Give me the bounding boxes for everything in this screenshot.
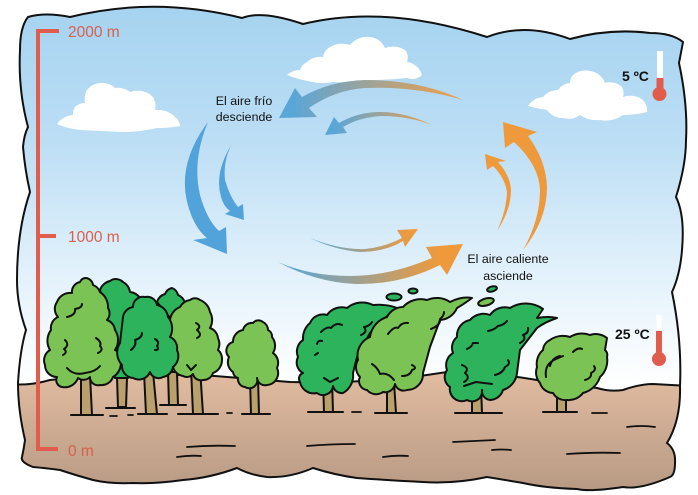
- arrow: large upper return: [279, 80, 463, 118]
- arrow: large lower flow: [278, 244, 463, 284]
- tree: light left large: [44, 278, 121, 415]
- tree: bent light 2: [536, 333, 607, 412]
- tree: bent dark 2: [445, 304, 557, 413]
- cloud top: [287, 37, 422, 83]
- tree: back dark left: [100, 279, 140, 408]
- tree: dark front: [117, 297, 178, 414]
- ground marks: [110, 412, 655, 457]
- text: warm air rises: El aire caliente: [467, 252, 549, 266]
- arrow: large warm air rising: [503, 122, 547, 250]
- arrow: small warm air rising: [485, 154, 511, 231]
- tree: light right of group: [170, 298, 222, 414]
- text: warm air rises: asciende: [483, 269, 533, 283]
- text: cold air descends: desciende: [216, 110, 272, 124]
- tree: bent light 1: [356, 298, 472, 413]
- tree: small light: [226, 320, 278, 414]
- altitude scale: [38, 24, 120, 460]
- ground: [10, 372, 690, 495]
- arrow: small cold air descending: [219, 144, 244, 220]
- cloud left: [57, 83, 180, 132]
- label: 2000 m: 2000 m: [68, 24, 120, 41]
- arrow: large cold air descending: [185, 122, 227, 254]
- thermometer: 25 ºC: [615, 315, 666, 366]
- tree: back dark right: [157, 288, 186, 405]
- label: 0 m: 0 m: [68, 443, 94, 460]
- label: 25 ºC: 25 ºC: [615, 326, 650, 342]
- thermometer: 5 ºC: [622, 51, 666, 101]
- leaves blown by wind: [386, 285, 497, 307]
- tree: bent dark 1: [297, 302, 397, 412]
- arrow: small lower flow: [310, 229, 418, 252]
- label: 1000 m: 1000 m: [68, 229, 120, 246]
- cloud right: [528, 71, 647, 121]
- arrow: small upper return: [325, 112, 432, 135]
- label: 5 ºC: 5 ºC: [622, 68, 649, 84]
- text: cold air descends: El aire frío: [216, 94, 272, 108]
